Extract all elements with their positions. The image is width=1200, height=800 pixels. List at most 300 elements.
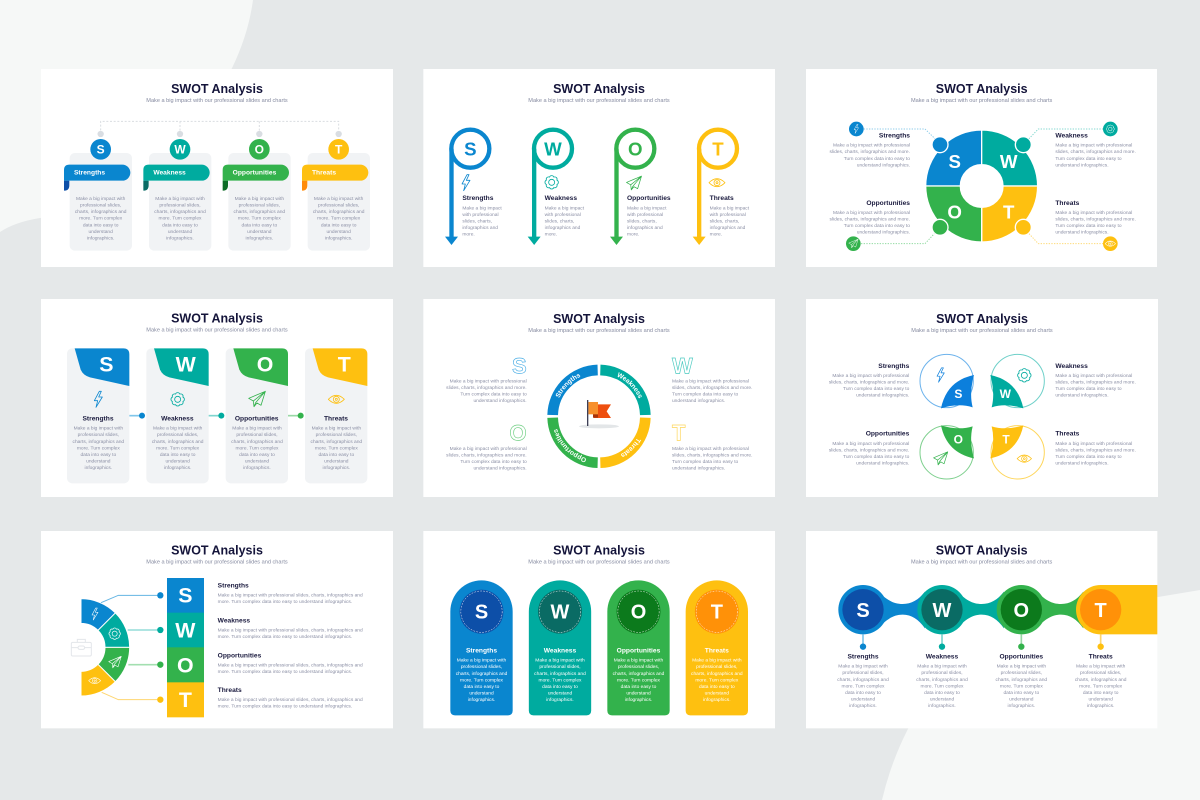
card: weakness: understand <box>168 229 192 235</box>
arrow: opportunities: slides, charts, <box>627 218 657 224</box>
arrow: strengths: Make a big impact <box>462 205 502 211</box>
text: weakness: Turn complex data into easy to <box>1055 386 1122 392</box>
panel 3: donut quadrants <box>806 69 1157 267</box>
arrow: threats: T <box>712 138 724 159</box>
subtitle: Make a big impact with our professional slides and charts <box>146 98 288 104</box>
arch: opportunities: professional slides, <box>618 664 659 670</box>
card: strengths: Make a big impact with <box>74 426 123 432</box>
step: strengths: data into easy to <box>845 690 881 696</box>
text: opportunities: Make a big impact with professional <box>450 446 527 452</box>
connector dots <box>157 592 163 703</box>
text: weakness: Turn complex data into easy to <box>1055 156 1122 162</box>
bubble: threats <box>990 425 1044 479</box>
text: weakness: slides, charts, infographics and more. <box>672 385 752 391</box>
text: opportunities: Turn complex data into easy to <box>843 454 910 460</box>
card: weakness: infographics. <box>164 465 191 471</box>
text: strengths: Turn complex data into easy to <box>843 386 910 392</box>
arrow: opportunities: with professional <box>627 212 663 218</box>
card: weakness: charts, infographics and <box>152 439 204 445</box>
arch: threats: T <box>711 602 723 624</box>
text: threats <box>1055 431 1136 467</box>
arch: threats: Make a big impact with <box>692 658 742 664</box>
outline letters: W <box>672 353 693 378</box>
card: strengths: S <box>99 353 113 377</box>
subtitle: Make a big impact with our professional slides and charts <box>911 328 1053 334</box>
card: opportunities <box>226 348 288 483</box>
heading: SWOT Analysis <box>171 82 263 96</box>
card: opportunities: infographics. <box>246 235 273 241</box>
step: strengths: professional slides, <box>842 670 884 676</box>
text: opportunities <box>218 652 363 675</box>
card: opportunities: charts, infographics and <box>231 439 283 445</box>
card: strengths <box>64 131 132 251</box>
card: weakness: more. Turn complex <box>159 216 202 222</box>
arrow: threats <box>693 130 750 245</box>
icon: flag <box>579 400 619 428</box>
arch: threats: more. Turn complex <box>695 677 739 683</box>
text: strengths: understand infographics. <box>857 162 910 168</box>
card: strengths: more. Turn complex <box>79 216 123 222</box>
bubble: opportunities: O <box>954 432 963 446</box>
arrow: threats: Threats <box>710 195 734 202</box>
donut chart <box>926 130 1038 242</box>
background blob top left <box>0 0 253 232</box>
text: strengths: slides, charts, infographics and more. <box>446 385 527 391</box>
card: strengths: infographics. <box>85 465 112 471</box>
text: strengths: Make a big impact with professional <box>450 378 527 384</box>
letter column: T <box>179 688 192 712</box>
arch: opportunities: more. Turn complex <box>617 677 661 683</box>
text: weakness: Make a big impact with professional slides, charts, infographics and <box>218 627 363 633</box>
dotted connectors <box>861 129 1103 244</box>
panel 4: tabbed cards <box>41 299 393 497</box>
arrow: weakness: Make a big impact <box>545 205 585 211</box>
arch: weakness: more. Turn complex <box>539 677 582 683</box>
card: threats: data into easy to <box>321 222 357 228</box>
text: threats: understand infographics. <box>1055 230 1109 236</box>
text: strengths: Make a big impact with professional slides, charts, infographics and <box>218 593 363 599</box>
card: threats: Threats <box>324 416 348 423</box>
donut letters: S <box>948 151 961 172</box>
step: opportunities: more. Turn complex <box>1000 683 1043 689</box>
card: strengths: more. Turn complex <box>77 445 120 451</box>
card: threats: infographics. <box>325 235 352 241</box>
card: strengths: infographics. <box>87 235 114 241</box>
step: threats: understand <box>1088 696 1113 702</box>
card: threats: understand <box>324 458 349 464</box>
arch: strengths: data into easy to <box>464 684 500 690</box>
donut letters: O <box>947 202 962 223</box>
half ring <box>81 599 130 696</box>
step: threats: data into easy to <box>1083 690 1119 696</box>
text: strengths: Turn complex data into easy to <box>844 156 910 162</box>
text: threats <box>1055 200 1136 236</box>
icon: briefcase <box>71 639 91 656</box>
text: weakness <box>1055 363 1136 399</box>
text: weakness: slides, charts, infographics and more. <box>1055 380 1136 386</box>
text: threats: Make a big impact with professional slides, charts, infographics and <box>218 697 363 703</box>
text: threats: understand infographics. <box>672 466 725 472</box>
card: opportunities: more. Turn complex <box>236 445 279 451</box>
arch: threats: understand <box>705 690 729 696</box>
arrow: weakness: Weakness <box>545 195 577 202</box>
arch: opportunities: infographics. <box>625 697 652 703</box>
card: threats: Make a big impact with <box>312 426 361 432</box>
card: weakness: data into easy to <box>160 452 196 458</box>
card: strengths: professional slides, <box>78 432 119 438</box>
text: threats: Make a big impact with professional <box>672 446 749 452</box>
text: opportunities <box>829 431 910 467</box>
text: weakness: Turn complex data into easy to <box>672 391 739 397</box>
connector: weakness to opportunities <box>209 413 224 419</box>
arch: threats: professional slides, <box>696 664 737 670</box>
heading: SWOT Analysis <box>553 82 645 96</box>
arch: weakness: W <box>551 602 570 624</box>
text: opportunities: Make a big impact with professional <box>833 210 910 216</box>
step: weakness: charts, infographics and <box>916 677 968 683</box>
arrow: strengths: S <box>464 138 477 159</box>
card: strengths: Strengths <box>82 416 114 423</box>
letter column: O <box>177 653 194 677</box>
card: opportunities: Make a big impact with <box>232 426 282 432</box>
text: weakness: Weakness <box>1055 133 1088 140</box>
text: threats: Turn complex data into easy to <box>672 459 739 465</box>
card: strengths: S <box>97 143 105 157</box>
arch: weakness <box>529 580 591 715</box>
card: threats: more. Turn complex <box>315 445 358 451</box>
arrow: weakness: more. <box>545 232 557 238</box>
text: strengths: understand infographics. <box>856 393 909 399</box>
ring labels <box>554 372 642 462</box>
card: opportunities <box>223 131 291 251</box>
arrow: threats: more. <box>710 232 722 238</box>
arch: strengths: S <box>475 602 488 624</box>
arch: strengths: infographics. <box>468 697 495 703</box>
card: strengths: charts, infographics and <box>75 209 127 215</box>
arch: opportunities: O <box>631 602 646 624</box>
bubble: strengths: S <box>954 387 962 401</box>
text: strengths: Strengths <box>878 363 910 370</box>
arrow: strengths: infographics and <box>462 225 498 231</box>
step: weakness <box>916 634 968 709</box>
card: opportunities: data into easy to <box>241 222 277 228</box>
text: strengths: Strengths <box>218 583 249 590</box>
half ring icons <box>89 608 121 684</box>
text: strengths <box>829 133 910 168</box>
timeline band <box>838 585 1157 634</box>
card: threats: T <box>338 353 351 377</box>
step: threats: charts, infographics and <box>1075 677 1127 683</box>
card: threats: infographics. <box>323 465 350 471</box>
step: opportunities: Make a big impact with <box>997 664 1046 670</box>
arch: threats: charts, infographics and <box>691 671 743 677</box>
timeline band: T <box>1095 600 1107 622</box>
bubble: opportunities <box>920 425 974 479</box>
card: weakness: charts, infographics and <box>154 209 206 215</box>
card: weakness: W <box>176 353 197 377</box>
card: weakness: understand <box>166 458 190 464</box>
arch: opportunities: Make a big impact with <box>614 658 664 664</box>
arrow: opportunities: O <box>628 138 643 159</box>
icon badge: weakness <box>1103 122 1118 136</box>
text: threats: Make a big impact with professional <box>1055 210 1132 216</box>
background blob bottom right <box>882 590 1200 800</box>
connector: opportunities to threats <box>288 413 304 419</box>
arrow: weakness: infographics and <box>545 225 581 231</box>
arrow: strengths <box>445 130 502 245</box>
card: opportunities: data into easy to <box>239 452 275 458</box>
text: opportunities: slides, charts, infographics and more. <box>446 453 527 459</box>
text: strengths: slides, charts, infographics and more. <box>829 149 910 155</box>
step: strengths: more. Turn complex <box>842 683 885 689</box>
text: threats: more. Turn complex data into easy to understand infographics. <box>218 704 352 710</box>
card: weakness: professional slides, <box>159 203 201 209</box>
step: weakness: data into easy to <box>924 690 960 696</box>
dashed connector <box>101 121 339 134</box>
outline letters <box>510 353 693 446</box>
subtitle: Make a big impact with our professional slides and charts <box>911 559 1053 565</box>
arch: threats: data into easy to <box>699 684 735 690</box>
step: strengths: Make a big impact with <box>838 664 888 670</box>
subtitle: Make a big impact with our professional slides and charts <box>528 98 670 104</box>
card: weakness: more. Turn complex <box>156 445 200 451</box>
arch: weakness: professional slides, <box>539 664 581 670</box>
arch: strengths: charts, infographics and <box>456 671 508 677</box>
text: opportunities: understand infographics. <box>856 461 909 467</box>
arch: strengths: more. Turn complex <box>460 677 504 683</box>
text: threats: Turn complex data into easy to <box>1055 223 1122 229</box>
card: weakness <box>146 348 209 483</box>
connector: strengths to weakness <box>129 413 145 419</box>
text: strengths: Make a big impact with professional <box>832 373 909 379</box>
card: opportunities: charts, infographics and <box>234 209 285 215</box>
card: weakness <box>143 131 211 251</box>
letter column: S <box>178 584 192 608</box>
arch: threats: Threats <box>705 648 729 655</box>
step: opportunities: charts, infographics and <box>996 677 1047 683</box>
heading: SWOT Analysis <box>936 543 1028 557</box>
text: opportunities: Turn complex data into easy to <box>460 459 527 465</box>
arrow: threats: slides, charts, <box>710 218 739 224</box>
ring labels: Strengths <box>556 374 580 398</box>
arrow: threats: with professional <box>710 212 746 218</box>
step: threats: infographics. <box>1087 703 1114 709</box>
step: weakness: professional slides, <box>921 670 963 676</box>
card: threats: charts, infographics and <box>313 209 365 215</box>
timeline band: O <box>1014 600 1029 622</box>
arrow: opportunities: Opportunities <box>627 195 671 202</box>
text: opportunities: Make a big impact with professional slides, charts, infographics and <box>218 662 363 668</box>
ring labels: Weakness <box>618 372 642 398</box>
step: strengths: Strengths <box>847 653 879 660</box>
step: threats: Make a big impact with <box>1076 664 1126 670</box>
panel 2: ring arrows <box>423 69 775 267</box>
arch: strengths: understand <box>469 690 494 696</box>
letter column <box>167 578 204 717</box>
card: threats: professional slides, <box>318 203 359 209</box>
card: threats: understand <box>326 229 351 235</box>
arrow: opportunities: more. <box>627 232 639 238</box>
arch: weakness: data into easy to <box>542 684 578 690</box>
arrow: opportunities: Make a big impact <box>627 205 667 211</box>
arrow: weakness <box>528 130 585 245</box>
heading: SWOT Analysis <box>171 543 263 557</box>
text: threats: slides, charts, infographics and more. <box>1055 217 1136 223</box>
step: weakness: Weakness <box>926 653 959 660</box>
card: strengths: Make a big impact with <box>76 196 126 202</box>
arrow: strengths: with professional <box>462 212 499 218</box>
arch: weakness: understand <box>548 690 572 696</box>
step: weakness: Make a big impact with <box>917 664 967 670</box>
icon badge: strengths <box>849 122 864 136</box>
timeline band: W <box>933 600 952 622</box>
text: weakness: slides, charts, infographics and more. <box>1055 149 1136 155</box>
card: threats <box>302 131 370 251</box>
text: threats: Turn complex data into easy to <box>1055 454 1122 460</box>
step: opportunities: Opportunities <box>1000 653 1043 660</box>
card: strengths <box>67 348 129 483</box>
heading: SWOT Analysis <box>553 543 645 557</box>
step: opportunities: understand <box>1009 696 1034 702</box>
donut letters: W <box>1000 151 1018 172</box>
text: strengths <box>829 363 910 399</box>
card: threats: more. Turn complex <box>317 216 361 222</box>
step: opportunities: data into easy to <box>1003 690 1039 696</box>
ring labels: Threats <box>621 439 642 457</box>
connectors <box>101 595 157 700</box>
text: opportunities: Opportunities <box>866 200 910 207</box>
text: opportunities: Opportunities <box>866 431 910 438</box>
heading: SWOT Analysis <box>936 312 1028 326</box>
panel 1: ribbon cards <box>41 69 393 267</box>
ring segments <box>553 370 645 463</box>
text: opportunities: understand infographics. <box>473 466 527 472</box>
outline letters: S <box>512 353 527 378</box>
card: opportunities: Make a big impact with <box>235 196 284 202</box>
text: threats: slides, charts, infographics and more. <box>672 453 752 459</box>
outline letters: O <box>510 421 527 446</box>
card: strengths: data into easy to <box>83 222 119 228</box>
text: threats: Threats <box>1055 200 1080 207</box>
step: opportunities <box>996 634 1047 709</box>
bubble: weakness <box>990 354 1044 408</box>
panel 7: half ring and letter column <box>41 531 393 728</box>
arch: threats: infographics. <box>703 697 731 703</box>
heading: SWOT Analysis <box>936 82 1028 96</box>
arrow: threats: Make a big impact <box>710 205 750 211</box>
icon badge: opportunities <box>846 236 861 251</box>
text: weakness: Make a big impact with professional <box>1055 373 1132 379</box>
arch: strengths: Make a big impact with <box>457 658 507 664</box>
step: weakness: infographics. <box>928 703 956 709</box>
arch: weakness: infographics. <box>546 697 574 703</box>
text: weakness: understand infographics. <box>672 398 725 404</box>
card: weakness: Weakness <box>161 416 194 423</box>
card: opportunities: understand <box>245 458 269 464</box>
text: threats: Threats <box>1055 431 1080 438</box>
arch: opportunities: data into easy to <box>621 684 657 690</box>
arch: weakness: charts, infographics and <box>534 671 586 677</box>
card: weakness: W <box>174 143 186 157</box>
card: opportunities: more. Turn complex <box>238 216 281 222</box>
arrow: threats: infographics and <box>710 225 746 231</box>
text: opportunities: Opportunities <box>218 652 262 659</box>
arch: opportunities: charts, infographics and <box>613 671 665 677</box>
ring labels: Opportunities <box>554 429 586 462</box>
text: threats: Threats <box>218 687 242 694</box>
timeline band: S <box>856 600 870 622</box>
card: threats <box>305 348 367 483</box>
bubble: weakness: W <box>1000 387 1012 401</box>
card: strengths: data into easy to <box>80 452 116 458</box>
text: weakness: Make a big impact with professional <box>672 378 749 384</box>
subtitle: Make a big impact with our professional slides and charts <box>911 98 1053 104</box>
letter column: W <box>175 618 196 642</box>
step: opportunities: professional slides, <box>1001 670 1042 676</box>
card: opportunities: Opportunities <box>235 416 279 423</box>
text: weakness <box>1055 133 1136 168</box>
text: opportunities <box>829 200 910 236</box>
text: opportunities: slides, charts, infographics and more. <box>829 448 909 454</box>
arch: opportunities: understand <box>626 690 651 696</box>
card: weakness: data into easy to <box>162 222 198 228</box>
step: weakness: more. Turn complex <box>921 683 964 689</box>
card: opportunities: O <box>257 353 273 377</box>
text: strengths: Make a big impact with professional <box>833 143 910 149</box>
text: weakness: Weakness <box>1055 363 1088 370</box>
card: opportunities: Opportunities <box>233 169 277 176</box>
step: strengths: infographics. <box>849 703 877 709</box>
text: weakness: Make a big impact with professional <box>1055 143 1132 149</box>
text: weakness <box>218 617 363 640</box>
step: threats <box>1075 634 1127 709</box>
arrow: strengths: more. <box>462 232 475 238</box>
arrow: opportunities: infographics and <box>627 225 663 231</box>
text: threats: Make a big impact with professional <box>1055 441 1132 447</box>
text: opportunities: understand infographics. <box>857 230 910 236</box>
subtitle: Make a big impact with our professional slides and charts <box>146 559 288 565</box>
step: threats: professional slides, <box>1080 670 1121 676</box>
text: strengths: understand infographics. <box>473 398 527 404</box>
arch: weakness: Make a big impact with <box>535 658 585 664</box>
heading: SWOT Analysis <box>171 312 263 326</box>
step: opportunities: infographics. <box>1008 703 1035 709</box>
text: opportunities: Turn complex data into easy to <box>844 223 910 229</box>
card: opportunities: infographics. <box>243 465 271 471</box>
card: strengths: charts, infographics and <box>73 439 124 445</box>
card: strengths: Strengths <box>74 169 105 176</box>
icon badge: threats <box>1103 236 1118 251</box>
arch: opportunities: Opportunities <box>617 648 661 655</box>
subtitle: Make a big impact with our professional slides and charts <box>528 328 670 334</box>
card: weakness: professional slides, <box>157 432 198 438</box>
text: strengths: slides, charts, infographics and more. <box>829 380 909 386</box>
step: threats: more. Turn complex <box>1079 683 1123 689</box>
arch: weakness: Weakness <box>544 648 577 655</box>
text: weakness: more. Turn complex data into easy to understand infographics. <box>218 634 352 640</box>
panel 5: ring with flag <box>424 299 775 497</box>
card: threats: charts, infographics and <box>311 439 362 445</box>
card: weakness: infographics. <box>166 235 194 241</box>
arch: strengths: Strengths <box>466 648 497 655</box>
panel 8: arch cards <box>423 531 775 728</box>
card: threats: Threats <box>312 169 336 176</box>
step: strengths: understand <box>851 696 875 702</box>
step: weakness: understand <box>930 696 954 702</box>
donut letters <box>947 151 1018 223</box>
arch: strengths <box>450 580 513 715</box>
card: opportunities: professional slides, <box>239 203 280 209</box>
